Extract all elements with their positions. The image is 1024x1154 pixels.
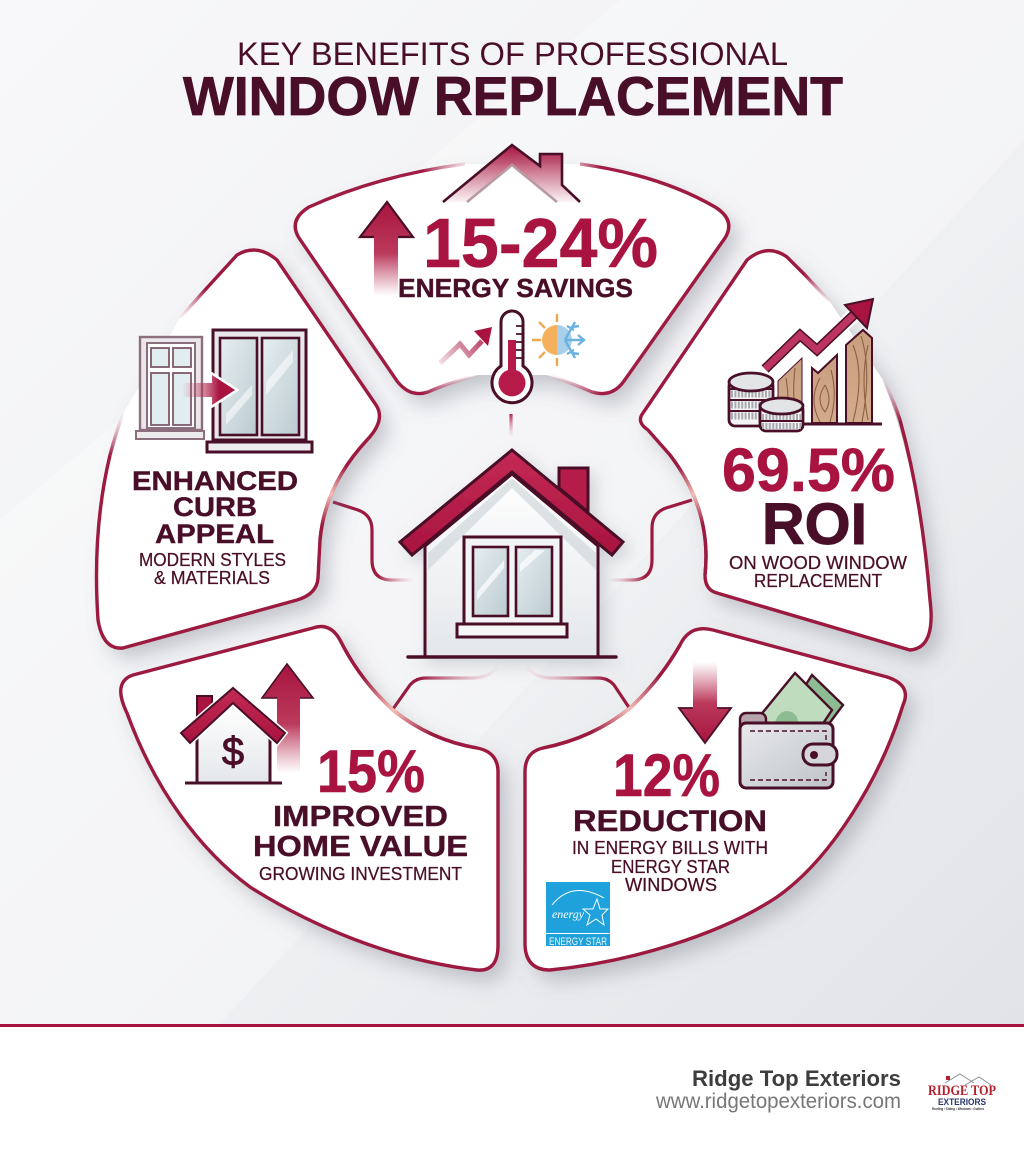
panel: roi	[640, 251, 931, 650]
icon: sun and snowflake	[532, 314, 584, 366]
logo	[928, 1074, 996, 1111]
logo: EXTERIORS	[938, 1097, 986, 1107]
description: wood window replacement	[729, 553, 907, 591]
website: www.ridgetopexteriors.com	[655, 1090, 901, 1113]
stat: 12%: 12%	[613, 742, 720, 809]
icon: roof	[443, 145, 580, 202]
connector lines	[333, 414, 692, 709]
icon: energy star logo	[546, 882, 610, 948]
description: wood window replacement: REPLACEMENT	[754, 571, 882, 591]
description: wood window replacement: ON WOOD WINDOW	[729, 553, 907, 573]
title line 1: KEY BENEFITS OF PROFESSIONAL	[237, 36, 788, 72]
title line 2: WINDOW REPLACEMENT	[183, 65, 843, 127]
description: energy bills: WINDOWS	[625, 875, 717, 895]
icon: down arrow	[679, 662, 731, 743]
stat: 15%: 15%	[317, 738, 425, 805]
description: modern styles	[139, 550, 286, 588]
icon: energy star logo: energy	[552, 907, 585, 921]
chimney	[559, 468, 588, 512]
panel: reduction	[525, 629, 905, 970]
footer	[0, 1024, 1024, 1154]
icon: house with dollar	[181, 688, 285, 783]
icon: thermometer	[492, 311, 532, 403]
icon: rising arrow	[440, 327, 492, 363]
icon: new window	[207, 330, 312, 452]
stat: 15-24%: 15-24%	[423, 204, 658, 282]
label: improved home value: HOME VALUE	[253, 831, 468, 863]
label: improved home value: IMPROVED	[273, 801, 448, 833]
label: energy savings: ENERGY SAVINGS	[398, 273, 633, 303]
description: energy bills: ENERGY STAR	[611, 857, 730, 877]
center house	[400, 450, 623, 657]
label: enhanced curb appeal: ENHANCED	[132, 466, 298, 496]
ground line	[408, 655, 616, 659]
label: reduction: REDUCTION	[573, 805, 767, 838]
icon: wood bars	[778, 330, 882, 424]
company name: Ridge Top Exteriors	[692, 1066, 901, 1091]
logo: Roofing • Siding • Windows • Gutters	[932, 1107, 984, 1111]
label: enhanced curb appeal: CURB	[173, 492, 257, 522]
description: energy bills	[572, 838, 768, 895]
panel: energy savings	[295, 145, 729, 403]
icon: up arrow	[360, 202, 413, 296]
icon: old window	[136, 337, 204, 439]
label: roi: ROI	[762, 492, 867, 557]
window	[457, 537, 567, 637]
panel: home value	[121, 626, 498, 970]
icon: growth arrow	[765, 299, 873, 369]
stat: 69.5%: 69.5%	[722, 436, 895, 504]
icon: energy star logo: ENERGY STAR	[549, 936, 607, 948]
house walls	[425, 474, 598, 657]
description: modern styles: MODERN STYLES	[139, 550, 286, 570]
roof	[400, 450, 623, 555]
icon: house with dollar: $	[222, 730, 244, 774]
icon: wallet with money	[740, 673, 843, 788]
icon: up arrow	[262, 664, 313, 773]
label: enhanced curb appeal: APPEAL	[155, 519, 274, 549]
description: growing investment: GROWING INVESTMENT	[259, 864, 462, 884]
description: modern styles: & MATERIALS	[154, 568, 270, 588]
label: improved home value	[253, 801, 468, 863]
logo: RIDGE TOP	[928, 1083, 996, 1099]
icon: replace arrow	[182, 375, 235, 405]
panel: curb appeal	[96, 250, 379, 648]
label: enhanced curb appeal	[132, 466, 298, 549]
icon: coins	[729, 373, 803, 431]
description: energy bills: IN ENERGY BILLS WITH	[572, 838, 768, 858]
arrow head outline	[360, 202, 413, 237]
title	[183, 36, 843, 127]
roof shade	[428, 478, 596, 570]
